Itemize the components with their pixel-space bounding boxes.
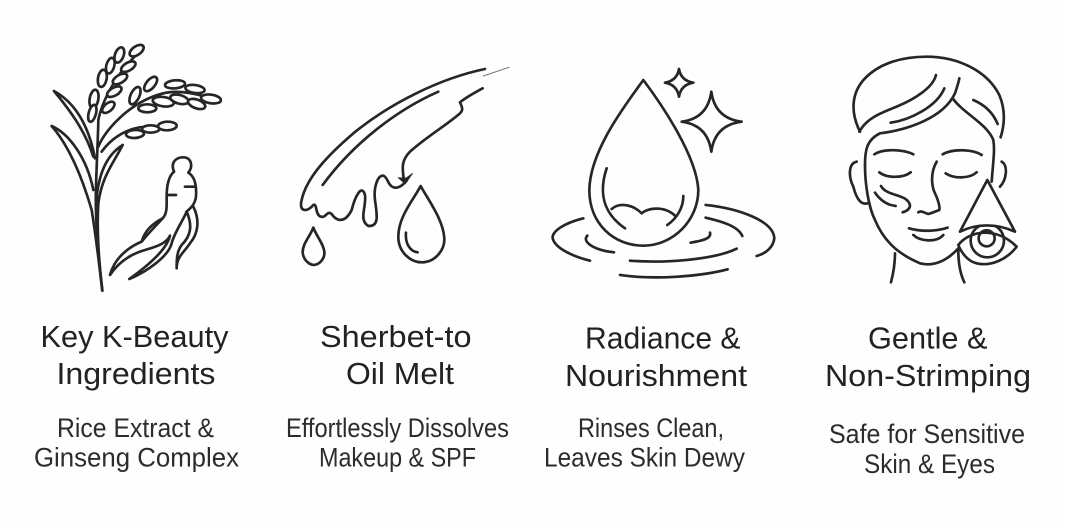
icon: melting sherbet with drops <box>301 67 509 265</box>
melting swoosh <box>301 69 485 226</box>
face outline, ears and neck <box>850 162 1006 282</box>
inner highlight line <box>323 92 438 185</box>
heading <box>825 322 1031 393</box>
subtext: Rinses Clean, <box>578 413 724 443</box>
heading: Oil Melt <box>346 357 455 391</box>
heading: Ingredients <box>56 357 216 391</box>
heading: Non-Strimping <box>825 359 1031 393</box>
subtext: Ginseng Complex <box>34 442 239 472</box>
small drop <box>303 228 324 265</box>
arrow line <box>403 88 483 183</box>
drop <box>589 80 698 246</box>
ginseng root <box>110 157 197 279</box>
icon: face with eye and triangle <box>850 57 1017 282</box>
icon: rice stalk and ginseng root <box>52 43 221 291</box>
heading: Key K-Beauty <box>40 320 229 354</box>
heading <box>565 322 748 393</box>
subtext <box>829 419 1025 479</box>
large drop <box>398 186 444 262</box>
subtext: Effortlessly Dissolves <box>286 413 509 443</box>
subtext: Safe for Sensitive <box>829 419 1025 449</box>
panel: sherbet-to-oil melt <box>286 67 509 472</box>
trailing line <box>483 67 509 76</box>
subtext: Leaves Skin Dewy <box>544 442 746 472</box>
panel: radiance and nourishment <box>544 69 774 472</box>
heading <box>40 320 229 391</box>
subtext <box>544 413 746 472</box>
eye <box>958 224 1017 264</box>
panel: key k-beauty ingredients <box>34 43 239 472</box>
subtext: Makeup & SPF <box>319 442 476 472</box>
hair <box>854 57 1004 182</box>
heading <box>320 320 472 391</box>
icon: water drop with sparkles and ripples <box>553 69 774 277</box>
facial features <box>874 150 982 240</box>
heading: Gentle & <box>868 322 988 356</box>
subtext <box>286 413 509 472</box>
small sparkle <box>665 69 693 97</box>
subtext: Rice Extract & <box>57 413 214 443</box>
heading: Nourishment <box>565 359 748 393</box>
ripples <box>553 205 774 277</box>
triangle <box>960 180 1015 232</box>
rice stalk <box>52 43 221 291</box>
large sparkle <box>682 92 742 152</box>
panel: gentle and non-stripping <box>825 57 1031 479</box>
subtext <box>34 413 239 472</box>
subtext: Skin & Eyes <box>864 449 995 479</box>
heading: Radiance & <box>585 322 740 356</box>
arrowhead <box>398 173 413 184</box>
heading: Sherbet-to <box>320 320 472 354</box>
